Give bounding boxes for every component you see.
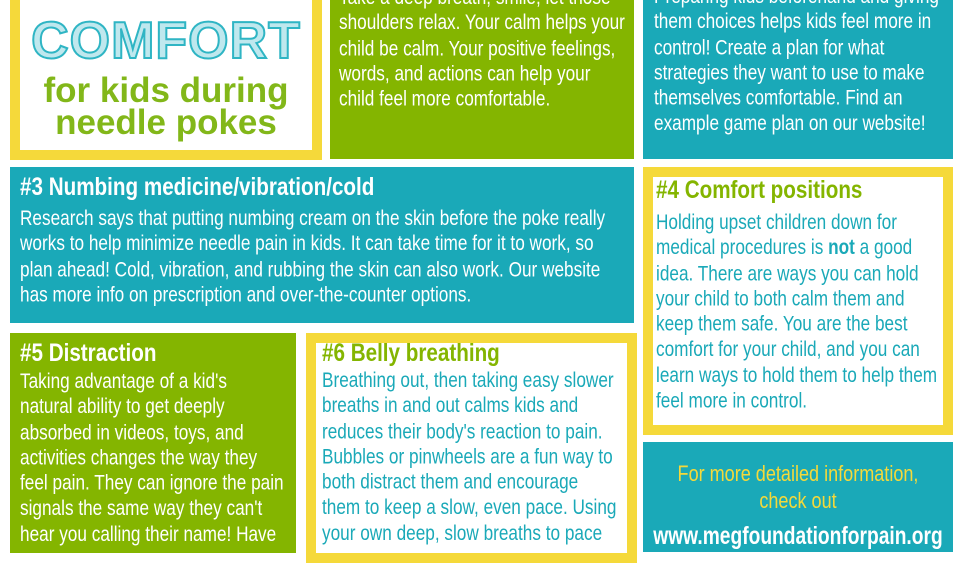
panel: #5 distraction [10, 333, 296, 553]
text: numbing body: plan ahead! Cold, vibration, and rubbing the skin can also work. Our website [20, 258, 600, 281]
subtitle [44, 71, 288, 142]
text: plan body: them choices helps kids feel more in [654, 11, 931, 34]
panel: title [10, 0, 322, 160]
text: breathing body: reduces their body's reaction to pain. [322, 420, 603, 443]
text: positions body [656, 211, 937, 413]
panel: #1 calm [330, 0, 634, 159]
panel: more info [643, 442, 953, 552]
panel: #2 plan [643, 0, 953, 159]
text: info [678, 462, 918, 514]
text: url: www.megfoundationforpain.org [653, 522, 943, 550]
text: numbing body: has more info on prescription and over-the-counter options. [20, 284, 471, 307]
text: breathing body: breaths in and out calms kids and [322, 395, 578, 418]
title: comfort: COMFORT [31, 12, 301, 70]
text: distraction body: natural ability to get deeply [20, 396, 225, 419]
text: breathing body: them to keep a slow, even pace. Using [322, 497, 616, 520]
text: info: For more detailed information, [678, 462, 918, 486]
subtitle: needle pokes [55, 103, 277, 142]
text: calm body: words, and actions can help your [339, 63, 590, 86]
text: distraction body: Taking advantage of a kid's [20, 370, 227, 393]
text: plan body: control! Create a plan for what [654, 36, 884, 59]
panel: #3 numbing [10, 167, 634, 323]
text: positions body: comfort for your child, and you can [656, 339, 920, 362]
text: positions body: Holding upset children down for [656, 211, 897, 234]
text: distraction body: absorbed in videos, toys, and [20, 421, 244, 444]
text: numbing body: works to help minimize needle pain in kids. It can take time for it to work, so [20, 233, 594, 256]
text: positions body: your child to both calm them and [656, 288, 905, 311]
text: calm body: child be calm. Your positive feelings, [339, 37, 615, 60]
panel: #6 belly breathing [306, 333, 637, 563]
text: plan body: strategies they want to use to make [654, 62, 925, 85]
text: distraction body: signals the same way they can't [20, 498, 262, 521]
text: distraction body: hear you calling their name! Have [20, 523, 276, 546]
heading: #4: #4 Comfort positions [656, 176, 862, 204]
text: distraction body [20, 370, 284, 546]
text: plan body [654, 0, 939, 136]
heading: #6: #6 Belly breathing [322, 339, 500, 367]
text: calm body [339, 0, 625, 111]
text: breathing body [322, 369, 616, 545]
text: numbing body [20, 207, 605, 307]
text: breathing body: Breathing out, then taking easy slower [322, 369, 614, 392]
text: distraction body: activities changes the way they [20, 447, 257, 470]
text: calm body: shoulders relax. Your calm helps your [339, 12, 625, 35]
text: breathing body: both distract them and encourage [322, 471, 578, 494]
text: plan body: example game plan on our website! [654, 113, 926, 136]
heading: #3: #3 Numbing medicine/vibration/cold [20, 173, 374, 201]
text: positions body: keep them safe. You are the best [656, 313, 907, 336]
text: positions body: feel more in control. [656, 390, 807, 413]
text: positions body: learn ways to hold them to help them [656, 364, 937, 387]
text: positions body: idea. There are ways you can hold [656, 262, 919, 285]
text: breathing body: your own deep, slow breaths to pace [322, 522, 602, 545]
text: calm body: child feel more comfortable. [339, 88, 550, 111]
heading: #5: #5 Distraction [20, 339, 156, 367]
text: numbing body: Research says that putting numbing cream on the skin before the poke really [20, 207, 605, 230]
subtitle: for kids during [44, 71, 288, 110]
text: positions body: medical procedures is not a good [656, 237, 912, 260]
text: breathing body: Bubbles or pinwheels are a fun way to [322, 446, 613, 469]
panel: #4 positions [643, 167, 953, 435]
text: distraction body: feel pain. They can ignore the pain [20, 472, 284, 495]
text: info: check out [759, 489, 837, 514]
text: plan body: themselves comfortable. Find an [654, 87, 903, 110]
